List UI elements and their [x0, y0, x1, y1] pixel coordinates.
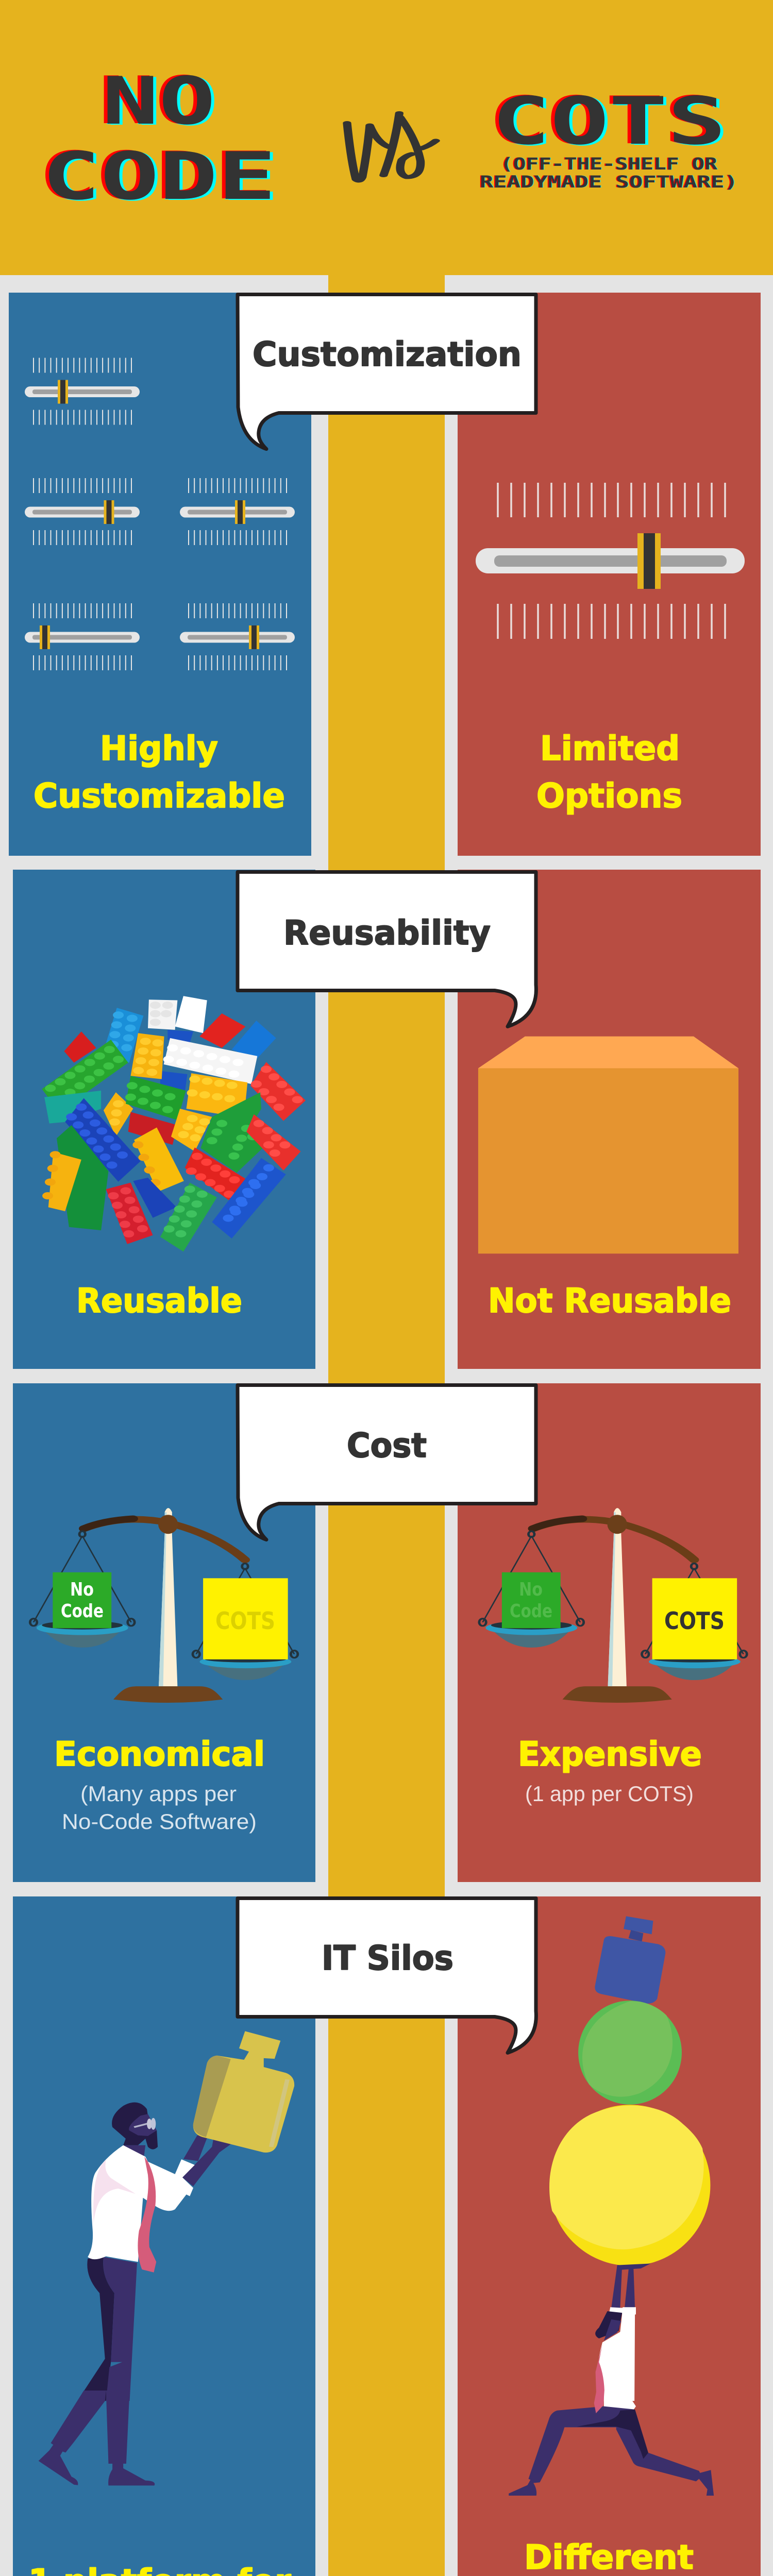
- title: no code: [42, 63, 276, 214]
- icon: closed box: [478, 1037, 738, 1253]
- icon: scale no code: [30, 1508, 298, 1703]
- slider: single option: [476, 483, 745, 639]
- illustration: man holding stacked items: [509, 1916, 714, 2496]
- icon: scale no code: Code: [61, 1601, 104, 1622]
- icon: scale cots: No: [519, 1579, 543, 1600]
- panel: it silos cots: [458, 1896, 761, 2576]
- icon: lego bricks: [42, 996, 306, 1251]
- illustration: man holding one bottle: [39, 2031, 294, 2485]
- icon: scale no code: No: [70, 1579, 94, 1600]
- panel: reusability cots: [458, 870, 761, 1369]
- title: cots: READYMADE SOFTWARE): [480, 172, 738, 192]
- icon: scale cots: [479, 1508, 747, 1703]
- label: economical: [54, 1735, 265, 1834]
- title: cots: [480, 83, 738, 192]
- panel: cost no code: [13, 1383, 315, 1882]
- title: cots: (OFF-THE-SHELF OR: [500, 154, 718, 174]
- speech bubble: customization: [238, 295, 536, 449]
- label: expensive: (1 app per COTS): [525, 1782, 694, 1806]
- label: limited options: Limited: [540, 730, 680, 768]
- icon: scale cots: Code: [510, 1601, 552, 1622]
- panel: cost cots: [458, 1383, 761, 1882]
- speech bubble: it silos: IT Silos: [322, 1939, 453, 1978]
- sliders: many options: [25, 358, 295, 670]
- label: limited options: Options: [536, 777, 682, 816]
- speech bubble: it silos: [238, 1898, 536, 2053]
- panel: customization no code: [9, 293, 311, 856]
- label: highly customizable: Customizable: [33, 777, 285, 816]
- speech bubble: reusability: Reusability: [283, 914, 491, 953]
- label: different cots: Different: [524, 2538, 694, 2576]
- label: economical: Economical: [54, 1735, 265, 1774]
- icon: scale no code: COTS: [215, 1607, 275, 1635]
- panel: customization cots: [458, 293, 761, 856]
- label: limited options: [536, 730, 682, 816]
- label: highly customizable: Highly: [100, 730, 218, 768]
- title: no code: NO: [102, 63, 215, 139]
- label: reusable: Reusable: [76, 1282, 242, 1320]
- vs script: [347, 113, 436, 181]
- label: economical: No-Code Software): [62, 1809, 257, 1834]
- label: expensive: [518, 1735, 702, 1806]
- label: not reusable: Not Reusable: [488, 1282, 731, 1320]
- label: expensive: Expensive: [518, 1735, 702, 1774]
- speech bubble: reusability: [238, 872, 536, 1026]
- panel: it silos no code: [13, 1896, 315, 2576]
- speech bubble: customization: Customization: [253, 335, 522, 374]
- speech bubble: cost: [238, 1385, 536, 1539]
- title: no code: CODE: [42, 138, 276, 214]
- label: economical: (Many apps per: [80, 1782, 237, 1806]
- panel: reusability no code: [13, 870, 315, 1369]
- speech bubble: cost: Cost: [347, 1427, 427, 1465]
- icon: scale cots: COTS: [664, 1607, 725, 1635]
- title: cots: COTS: [492, 83, 726, 159]
- label: highly customizable: [33, 730, 285, 816]
